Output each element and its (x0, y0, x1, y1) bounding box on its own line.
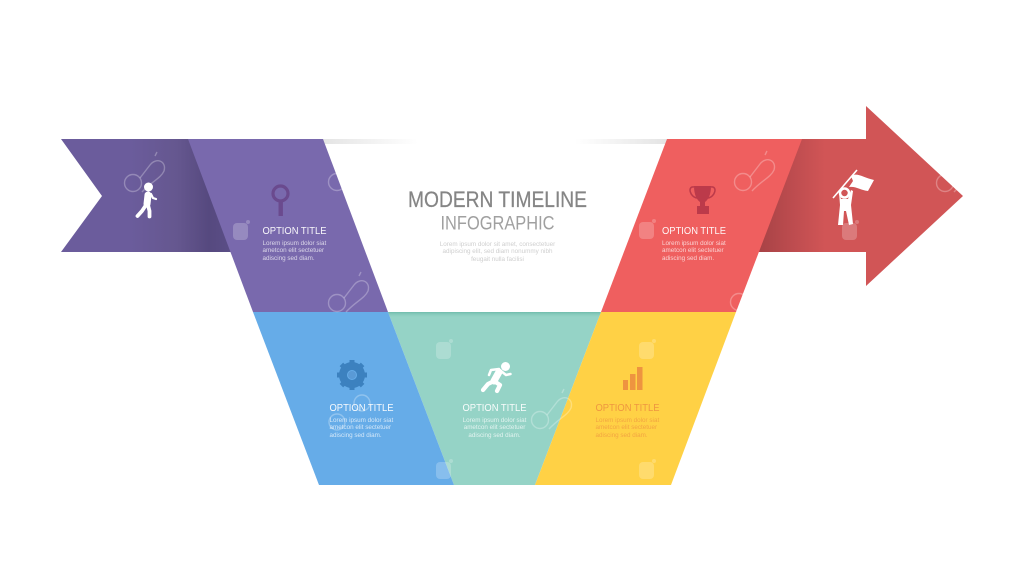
body text: blue: adiscing sed diam. (330, 432, 382, 439)
icon: bar chart (623, 367, 642, 390)
body text: red (662, 240, 726, 262)
panel: yellow (535, 312, 736, 485)
icon: trophy (690, 186, 715, 214)
title (408, 187, 587, 234)
body text: yellow (596, 417, 659, 439)
option title: blue: OPTION TITLE (330, 403, 394, 414)
panel: teal (388, 312, 601, 485)
arrow head: red (750, 106, 963, 286)
icon: gear (337, 360, 367, 390)
icon: person with flag (833, 170, 874, 225)
arrow shaft shading: red (750, 139, 825, 252)
body text: yellow: ametcon elit sectetuer (596, 424, 657, 431)
intro text: feugait nulla facilisi (471, 256, 524, 263)
body text: purple (262, 240, 326, 262)
icon: walking person (138, 182, 156, 216)
heading line 1: MODERN TIMELINE (408, 187, 587, 212)
body text: teal: ametcon elit sectetuer (464, 424, 525, 431)
body text: blue: ametcon elit sectetuer (330, 424, 391, 431)
top shade: teal (388, 312, 601, 318)
body text: purple: Lorem ipsum dolor siat (262, 240, 326, 247)
option title: teal: OPTION TITLE (462, 403, 527, 414)
body text: red: Lorem ipsum dolor siat (662, 240, 726, 247)
body text: yellow: Lorem ipsum dolor siat (596, 417, 659, 424)
body text: yellow: adiscing sed diam. (596, 432, 648, 439)
panel: purple (188, 139, 388, 312)
intro text: Lorem ipsum dolor sit amet, consectetuer (440, 241, 555, 248)
intro text (440, 241, 555, 263)
option title: red: OPTION TITLE (662, 226, 726, 237)
body text: teal: adiscing sed diam. (468, 432, 521, 439)
body text: blue: Lorem ipsum dolor siat (330, 417, 393, 424)
body text: red: adiscing sed diam. (662, 255, 714, 262)
body text: teal (463, 417, 527, 439)
body text: purple: ametcon elit sectetuer (262, 247, 324, 254)
option title: purple: OPTION TITLE (262, 226, 327, 237)
body text: blue (330, 417, 393, 439)
watermarks (124, 151, 977, 479)
icon: runner (483, 362, 510, 391)
panel: blue (253, 312, 454, 485)
body text: teal: Lorem ipsum dolor siat (463, 417, 527, 424)
shadow: under top edge left (323, 139, 418, 144)
icon: magnifier (273, 186, 288, 216)
shadow: under top edge right (575, 139, 667, 144)
arrow tail: purple ribbon (61, 139, 235, 252)
intro text: adipiscing elit, sed diam nonummy nibh (443, 248, 553, 255)
body text: purple: adiscing sed diam. (262, 255, 315, 262)
heading line 2: INFOGRAPHIC (440, 212, 554, 234)
body text: red: ametcon elit sectetuer (662, 247, 724, 254)
panel: red (601, 139, 802, 312)
option title: yellow: OPTION TITLE (596, 403, 660, 414)
